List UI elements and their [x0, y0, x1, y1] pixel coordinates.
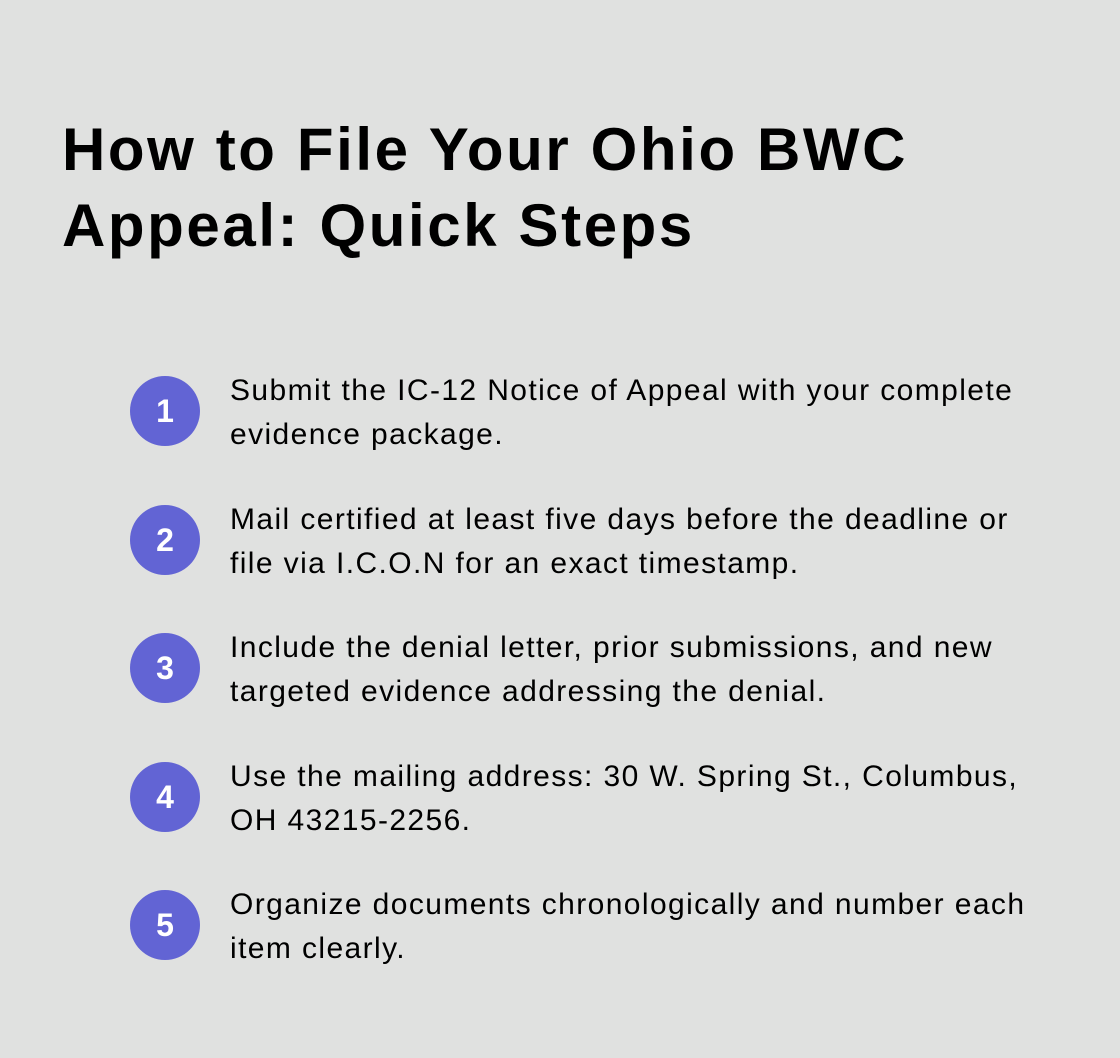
step 2: file via I.C.O.N for an exact timestamp. [230, 547, 800, 580]
step 4: Use the mailing address: 30 W. Spring St., Columbus, [230, 760, 1018, 793]
step 1: 1 [156, 393, 174, 429]
title: How to File Your Ohio BWC [62, 116, 908, 183]
step 4: OH 43215-2256. [230, 804, 471, 837]
title: Appeal: Quick Steps [62, 192, 695, 259]
step 3: Include the denial letter, prior submissions, and new [230, 631, 993, 664]
step 5: item clearly. [230, 932, 406, 965]
step 1: Submit the IC-12 Notice of Appeal with your complete [230, 374, 1013, 407]
step 3: targeted evidence addressing the denial. [230, 675, 826, 708]
step 2: Mail certified at least five days before the deadline or [230, 503, 1009, 536]
step 4: 4 [156, 779, 174, 815]
step 3: 3 [156, 650, 174, 686]
step 1: evidence package. [230, 418, 504, 451]
step 1 [130, 374, 1013, 451]
step 5 [130, 888, 1025, 965]
step 3 [130, 631, 993, 708]
step 2: 2 [156, 522, 174, 558]
step 2 [130, 503, 1009, 580]
title [62, 116, 908, 259]
step 4 [130, 760, 1018, 837]
step 5: Organize documents chronologically and number each [230, 888, 1025, 921]
step 5: 5 [156, 907, 174, 943]
